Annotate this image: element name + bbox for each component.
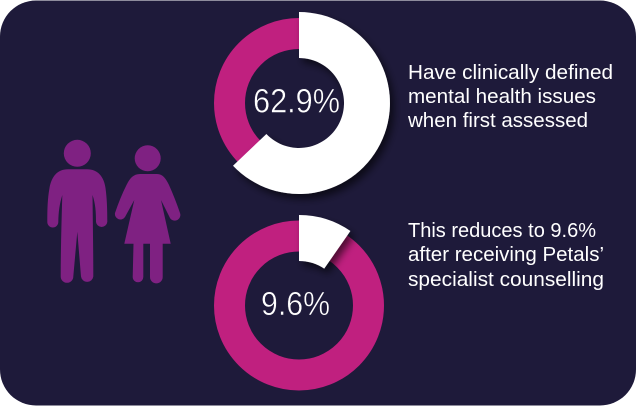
ring: remainder <box>230 34 368 172</box>
icon: woman <box>115 145 180 283</box>
value: 9.6%: 9.6% <box>261 285 330 322</box>
chart: 62.9% donut <box>230 12 390 194</box>
text: after counselling: This reduces to 9.6% <box>408 220 596 242</box>
text: after counselling: after receiving Petals’ <box>408 244 604 266</box>
wedge: 9.6% <box>299 215 350 269</box>
text: first assessment: Have clinically defined <box>408 62 613 84</box>
value: 62.9%: 62.9% <box>253 82 340 120</box>
icon: man and woman <box>47 140 180 283</box>
chart: 9.6% donut <box>230 215 368 375</box>
text: first assessment: when first assessed <box>407 110 588 132</box>
wedge: 62.9% <box>233 12 390 194</box>
text: after counselling: specialist counselling <box>408 269 604 291</box>
text: first assessment: mental health issues <box>408 86 596 108</box>
text: after counselling <box>408 220 604 291</box>
icon: man <box>47 140 107 283</box>
ring: remainder <box>230 236 368 375</box>
text: first assessment <box>407 62 613 132</box>
